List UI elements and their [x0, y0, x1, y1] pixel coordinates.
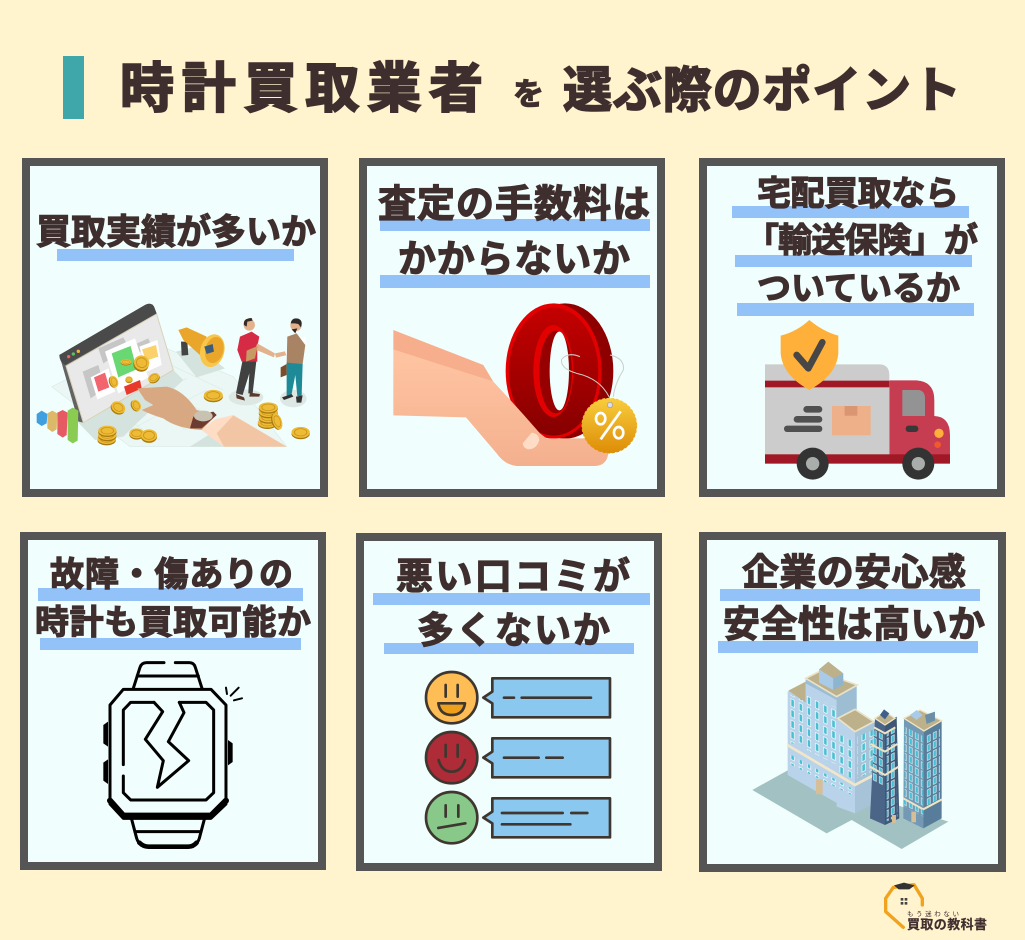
heading underlines: [38, 588, 303, 650]
heading: [723, 552, 985, 645]
title: 選ぶ際のポイント: [563, 64, 961, 118]
blue tower: [903, 710, 942, 828]
heading: 故障・傷ありの: [50, 556, 293, 594]
illustration: review faces and speech bubbles: [426, 672, 610, 843]
illustration: office buildings: [752, 662, 948, 849]
panel: company safety: [703, 536, 1002, 868]
heading: 宅配買取なら: [757, 175, 959, 213]
title: [120, 59, 961, 119]
heading: ついているか: [757, 270, 960, 308]
panel: delivery insurance: [703, 162, 1001, 493]
bar graph: [37, 408, 78, 443]
heading: 査定の手数料は: [378, 184, 650, 226]
heading: [35, 556, 311, 642]
side buttons: [103, 722, 233, 784]
truck cab: [889, 380, 950, 463]
title accent bar: [63, 56, 84, 119]
logo small caption: もう迷わない: [907, 909, 959, 918]
heading underline: [57, 249, 294, 261]
panel: buy record: [26, 162, 324, 493]
browser window: [59, 304, 173, 423]
heading: 「輸送保険」が: [745, 221, 978, 260]
heading underlines: [380, 219, 650, 288]
heading: 時計も買取可能か: [35, 604, 311, 642]
illustration: truck with shield: [765, 320, 950, 480]
hand: [393, 330, 608, 466]
stacks of coins: [97, 390, 310, 445]
logo house mark: [886, 883, 922, 927]
panel: damaged watches: [24, 536, 322, 866]
neutral face and review: [426, 792, 610, 843]
main building: [787, 662, 875, 813]
watch case: [110, 689, 226, 818]
heading: 買取実績が多いか: [36, 213, 316, 252]
heading: 企業の安心感: [742, 552, 966, 593]
ground: [752, 770, 948, 849]
two businessmen shaking hands: [229, 318, 307, 407]
hand with wristwatch: [137, 387, 287, 447]
title: 時計買取業者: [120, 59, 483, 119]
happy face and review: [426, 672, 610, 723]
heading: 悪い口コミが: [396, 556, 630, 597]
wheels: [797, 448, 934, 480]
heading: [378, 184, 650, 281]
panel: bad reviews: [360, 537, 658, 867]
logo wordmark: 買取の教科書: [907, 917, 987, 932]
impact marks: [226, 688, 242, 700]
dark tower: [870, 709, 899, 825]
price tag string: [561, 355, 623, 397]
truck cargo box: [765, 364, 950, 464]
percent tag: [582, 398, 637, 453]
panel: appraisal fee: [363, 162, 661, 493]
logo: [886, 883, 987, 932]
watch straps: [132, 663, 204, 847]
crack: [145, 702, 189, 787]
floor shadow and grid: [52, 340, 287, 447]
heading: かからないか: [398, 239, 630, 281]
heading: 安全性は高いか: [723, 604, 985, 645]
illustration: cracked watch: [103, 663, 242, 847]
heading underlines: [718, 589, 980, 653]
heading: [396, 556, 630, 651]
illustration: hand holding zero with percent tag: [393, 303, 637, 466]
illustration: online trading and handshake: [37, 304, 310, 447]
coins on screen: [107, 353, 161, 417]
heading: [745, 175, 978, 308]
red face and review: [426, 732, 610, 783]
heading underlines: [373, 593, 650, 654]
megaphone: [176, 327, 228, 377]
title: を: [513, 77, 544, 112]
heading underlines: [732, 206, 974, 316]
shield with check: [781, 320, 838, 390]
heading: 多くないか: [417, 610, 610, 651]
red zero: [506, 303, 613, 439]
